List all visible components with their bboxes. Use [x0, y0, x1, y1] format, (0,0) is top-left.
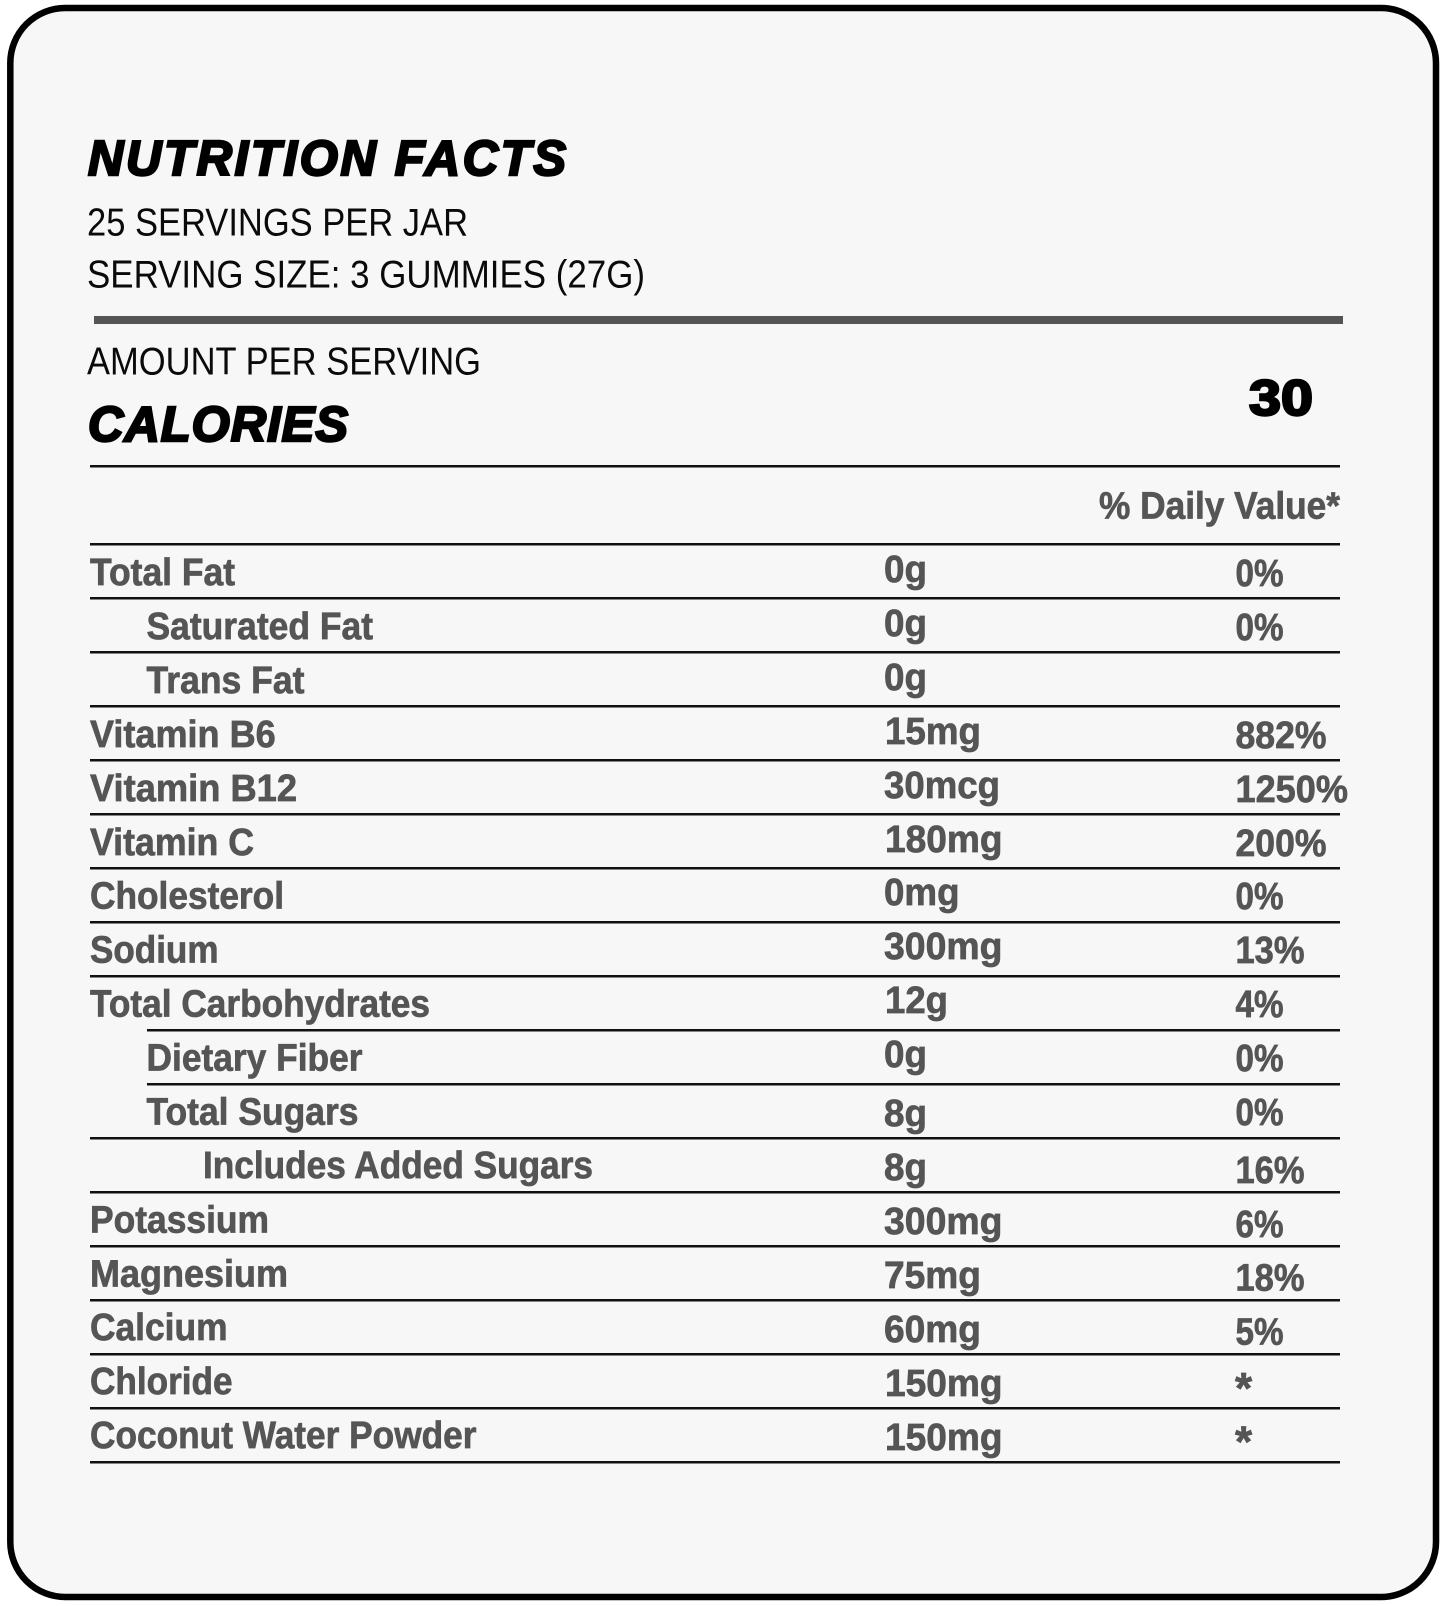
row: calcium: Calcium: [90, 1307, 228, 1349]
row: includes added sugars: 8g: [884, 1147, 927, 1189]
row: vitamin b6: 15mg: [885, 711, 981, 753]
row: coconut water powder: 150mg: [885, 1417, 1002, 1459]
row: includes added sugars: 16%: [1236, 1150, 1304, 1192]
row: chloride: [90, 1361, 1253, 1413]
row: vitamin c: 200%: [1236, 823, 1326, 865]
title: NUTRITION FACTS: [88, 132, 566, 186]
row: coconut water powder: Coconut Water Powder: [90, 1415, 477, 1457]
row: saturated fat: [146, 603, 1284, 649]
calories value: 30: [1249, 370, 1313, 426]
column heading: daily value: % Daily Value*: [1099, 486, 1340, 528]
heading: calories: CALORIES: [88, 398, 348, 452]
row: saturated fat: 0g: [884, 603, 927, 645]
row: total sugars: 0%: [1236, 1092, 1284, 1134]
row: potassium: Potassium: [90, 1200, 269, 1242]
row: vitamin b12: 1250%: [1236, 769, 1348, 811]
row: total sugars: Total Sugars: [146, 1091, 358, 1133]
row: dietary fiber: 0g: [884, 1034, 927, 1076]
row: trans fat: [146, 657, 927, 702]
row: cholesterol: Cholesterol: [90, 875, 284, 917]
row: magnesium: [90, 1254, 1304, 1300]
text block: serving size: SERVING SIZE: 3 GUMMIES (27G): [87, 254, 645, 296]
row: sodium: [90, 926, 1304, 972]
row: cholesterol: 0mg: [884, 872, 960, 914]
row: potassium: 300mg: [884, 1201, 1002, 1243]
row: dietary fiber: 0%: [1236, 1038, 1284, 1080]
row: vitamin c: Vitamin C: [90, 822, 254, 864]
row: total carbohydrates: 4%: [1236, 984, 1284, 1026]
row: potassium: [90, 1200, 1284, 1246]
row: coconut water powder: *: [1235, 1418, 1253, 1466]
row: includes added sugars: [203, 1145, 1304, 1192]
row: total carbohydrates: [90, 980, 1284, 1026]
row: chloride: *: [1235, 1364, 1253, 1413]
row: total fat: [90, 549, 1284, 595]
row: total fat: 0%: [1236, 553, 1284, 595]
row: magnesium: Magnesium: [90, 1254, 288, 1296]
row: total sugars: [146, 1091, 1284, 1135]
row: trans fat: Trans Fat: [146, 660, 305, 702]
row: chloride: Chloride: [90, 1361, 233, 1403]
row: calcium: [90, 1307, 1284, 1354]
row: includes added sugars: Includes Added Sugars: [203, 1145, 593, 1187]
row: calcium: 60mg: [884, 1309, 981, 1351]
row: saturated fat: Saturated Fat: [146, 606, 373, 648]
row: dietary fiber: [146, 1034, 1284, 1080]
row: vitamin b6: Vitamin B6: [90, 714, 276, 756]
row: cholesterol: 0%: [1236, 876, 1284, 918]
row: sodium: 300mg: [884, 926, 1002, 968]
row: total fat: 0g: [884, 549, 927, 591]
row: total carbohydrates: Total Carbohydrates: [90, 983, 430, 1025]
text block: amount per serving: AMOUNT PER SERVING: [87, 340, 481, 384]
row: total fat: Total Fat: [90, 552, 235, 594]
row: vitamin b12: [90, 765, 1348, 811]
row: calcium: 5%: [1236, 1312, 1284, 1354]
row: total sugars: 8g: [884, 1093, 927, 1135]
row: sodium: 13%: [1236, 930, 1304, 972]
row: vitamin b12: Vitamin B12: [90, 768, 297, 810]
row: cholesterol: [90, 872, 1284, 918]
row: trans fat: 0g: [884, 657, 927, 699]
row: potassium: 6%: [1236, 1204, 1284, 1246]
text block: servings per jar: 25 SERVINGS PER JAR: [87, 202, 468, 244]
row: magnesium: 75mg: [884, 1255, 981, 1297]
row: vitamin b6: 882%: [1236, 715, 1326, 757]
row: dietary fiber: Dietary Fiber: [146, 1037, 363, 1079]
row: sodium: Sodium: [90, 929, 218, 971]
row: vitamin c: [90, 819, 1326, 865]
row: chloride: 150mg: [885, 1363, 1002, 1405]
row: total carbohydrates: 12g: [885, 980, 948, 1022]
row: vitamin b12: 30mcg: [884, 765, 1000, 807]
row: vitamin c: 180mg: [885, 819, 1002, 861]
row: saturated fat: 0%: [1236, 607, 1284, 649]
row: vitamin b6: [90, 711, 1326, 757]
row: magnesium: 18%: [1236, 1258, 1304, 1300]
row: coconut water powder: [90, 1415, 1253, 1466]
